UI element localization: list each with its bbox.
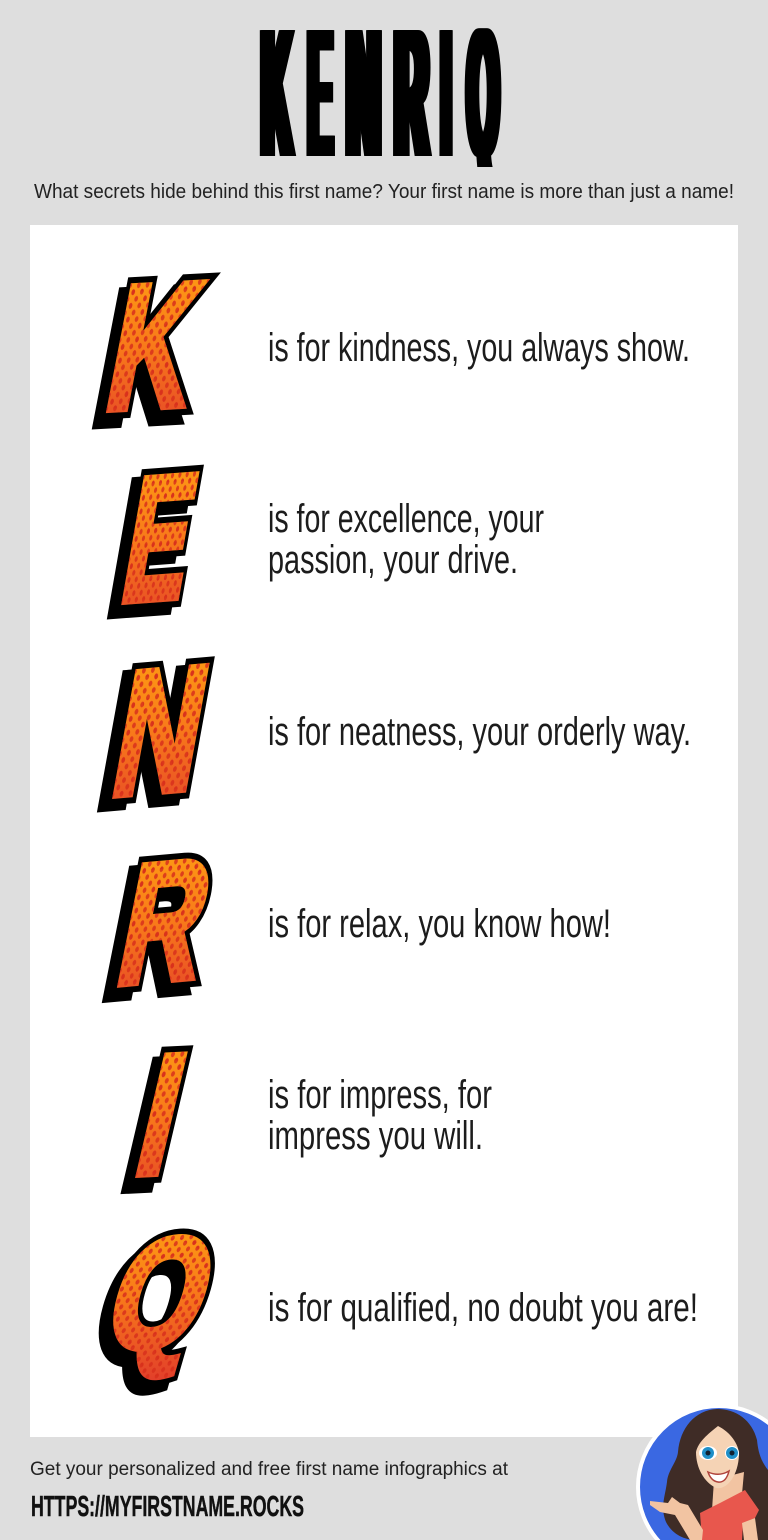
comic letter I: I bbox=[113, 1028, 192, 1220]
title bbox=[257, 0, 502, 167]
comic letter N: N bbox=[101, 628, 221, 832]
text: E lines: is for excellence, your bbox=[268, 497, 544, 541]
text: E lines: passion, your drive. bbox=[268, 538, 518, 582]
comic letter R: R bbox=[96, 832, 215, 1029]
comic letter E: E bbox=[111, 439, 208, 639]
footer url: HTTPS://MYFIRSTNAME.ROCKS bbox=[31, 1491, 304, 1523]
right eye bbox=[725, 1446, 739, 1460]
comic letter Q: Q bbox=[90, 1204, 233, 1384]
comic letter R: R bbox=[106, 823, 225, 1020]
comic letter R: R bbox=[106, 823, 225, 1020]
comic letter E: E bbox=[111, 439, 208, 639]
red top bbox=[700, 1490, 759, 1540]
comic letter N: N bbox=[101, 628, 221, 832]
comic letter I: I bbox=[122, 1018, 201, 1210]
text: R line: is for relax, you know how! bbox=[268, 902, 611, 946]
comic letter K: K bbox=[95, 246, 214, 447]
comic letter Q: Q bbox=[90, 1204, 233, 1384]
text: I lines: is for impress, for bbox=[268, 1073, 492, 1117]
comic letter I: I bbox=[122, 1018, 201, 1210]
avatar: woman in blue circle bbox=[638, 1406, 768, 1540]
comic letter K: K bbox=[86, 256, 205, 457]
comic letter Q: Q bbox=[80, 1214, 223, 1394]
left eye bbox=[699, 1446, 717, 1460]
comic letter Q: Q bbox=[90, 1204, 233, 1384]
comic letter N: N bbox=[101, 628, 221, 832]
comic letter I: I bbox=[122, 1018, 201, 1210]
arm and hand bbox=[650, 1497, 703, 1540]
panel: white letter panel bbox=[30, 225, 738, 1437]
face bbox=[696, 1426, 739, 1488]
neck bbox=[712, 1472, 744, 1510]
subtitle: What secrets hide behind this first name? Your first name is more than just a name! bbox=[34, 181, 734, 203]
right arm bbox=[742, 1518, 758, 1540]
comic letter N: N bbox=[91, 635, 211, 839]
comic letter E: E bbox=[101, 447, 198, 647]
text: E lines bbox=[268, 497, 544, 582]
comic letter E: E bbox=[111, 439, 208, 639]
text: I lines: impress you will. bbox=[268, 1114, 483, 1158]
comic letter R: R bbox=[106, 823, 225, 1020]
footer text: Get your personalized and free first name infographics at bbox=[30, 1459, 509, 1480]
hair bbox=[663, 1409, 768, 1540]
smile bbox=[708, 1471, 729, 1482]
comic letter K: K bbox=[95, 246, 214, 447]
comic letter K: K bbox=[95, 246, 214, 447]
text: I lines bbox=[268, 1073, 492, 1158]
